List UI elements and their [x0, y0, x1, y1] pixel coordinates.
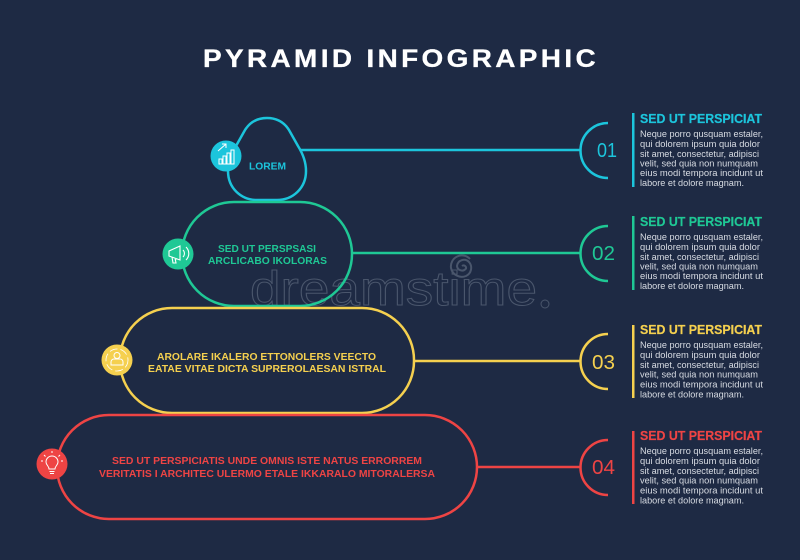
body text: eius modi tempora incidunt ut — [640, 486, 764, 496]
tier 2: green — [162, 202, 580, 306]
step 03 — [580, 323, 764, 400]
label — [208, 243, 327, 267]
icon: growth chart — [210, 140, 242, 172]
body text: sit amet, consectetur, adipisci — [640, 360, 759, 370]
body text: qui dolorem ipsum quia dolor — [640, 242, 760, 252]
step 01 — [580, 112, 764, 188]
heading: SED UT PERSPICIAT — [640, 215, 762, 229]
body text: labore et dolore magnam. — [640, 390, 744, 400]
icon: light bulb — [36, 448, 68, 480]
label: SED UT PERSPSASI — [218, 243, 316, 255]
body text: sit amet, consectetur, adipisci — [640, 466, 759, 476]
body text: labore et dolore magnam. — [640, 178, 744, 188]
body text: eius modi tempora incidunt ut — [640, 168, 764, 178]
arc — [580, 123, 608, 178]
body text: Neque porro qusquam estaler, — [640, 232, 763, 242]
body text: velit, sed quia non numquam — [640, 158, 758, 168]
connector line — [414, 360, 580, 362]
body text: labore et dolore magnam. — [640, 281, 744, 291]
title: PYRAMID INFOGRAPHIC — [203, 45, 599, 73]
body text: eius modi tempora incidunt ut — [640, 271, 764, 281]
body text: Neque porro qusquam estaler, — [640, 446, 763, 456]
tier 3: yellow — [102, 308, 580, 413]
number: 01 — [597, 140, 617, 162]
number: 03 — [592, 352, 615, 374]
body text: qui dolorem ipsum quia dolor — [640, 139, 760, 149]
label: LOREM — [249, 160, 286, 172]
body text: eius modi tempora incidunt ut — [640, 380, 764, 390]
divider bar — [632, 431, 634, 504]
outline shape — [57, 415, 477, 519]
divider bar — [632, 325, 634, 398]
label: VERITATIS I ARCHITEC ULERMO ETALE IKKARALO MITORALERSA — [99, 468, 435, 480]
body text: qui dolorem ipsum quia dolor — [640, 350, 760, 360]
step 02 — [580, 215, 764, 291]
divider bar — [632, 113, 634, 187]
outline shape — [182, 202, 352, 306]
divider bar — [632, 216, 634, 290]
body text — [640, 446, 764, 506]
body text: labore et dolore magnam. — [640, 496, 744, 506]
body text — [640, 129, 764, 188]
body text: qui dolorem ipsum quia dolor — [640, 456, 760, 466]
label: AROLARE IKALERO ETTONOLERS VEECTO — [157, 351, 376, 363]
step 04 — [580, 429, 764, 506]
heading: SED UT PERSPICIAT — [640, 429, 762, 443]
body text: sit amet, consectetur, adipisci — [640, 252, 759, 262]
watermark: dreamstime — [250, 263, 537, 316]
body text: velit, sed quia non numquam — [640, 370, 758, 380]
body text: sit amet, consectetur, adipisci — [640, 149, 759, 159]
label — [148, 351, 387, 375]
tier 1: cyan — [210, 118, 580, 200]
body text — [640, 232, 764, 291]
label: ARCLICABO IKOLORAS — [208, 255, 327, 267]
body text: velit, sed quia non numquam — [640, 262, 758, 272]
connector line — [477, 466, 580, 468]
body text: velit, sed quia non numquam — [640, 476, 758, 486]
body text — [640, 340, 764, 400]
label — [99, 455, 435, 480]
arc — [580, 334, 608, 389]
outline shape — [120, 308, 414, 413]
arc — [580, 440, 608, 495]
heading: SED UT PERSPICIAT — [640, 323, 762, 337]
connector line — [298, 149, 580, 151]
label: EATAE VITAE DICTA SUPREROLAESAN ISTRAL — [148, 363, 387, 375]
connector line — [352, 252, 580, 254]
body text: Neque porro qusquam estaler, — [640, 340, 763, 350]
tier 4: red — [36, 415, 580, 519]
icon: team — [102, 344, 132, 376]
label: SED UT PERSPICIATIS UNDE OMNIS ISTE NATUS ERRORREM — [112, 455, 422, 467]
number: 02 — [592, 243, 615, 265]
heading: SED UT PERSPICIAT — [640, 112, 762, 126]
arc — [580, 226, 608, 281]
icon: megaphone — [162, 238, 194, 270]
outline shape — [228, 118, 306, 200]
number: 04 — [592, 457, 615, 479]
body text: Neque porro qusquam estaler, — [640, 129, 763, 139]
